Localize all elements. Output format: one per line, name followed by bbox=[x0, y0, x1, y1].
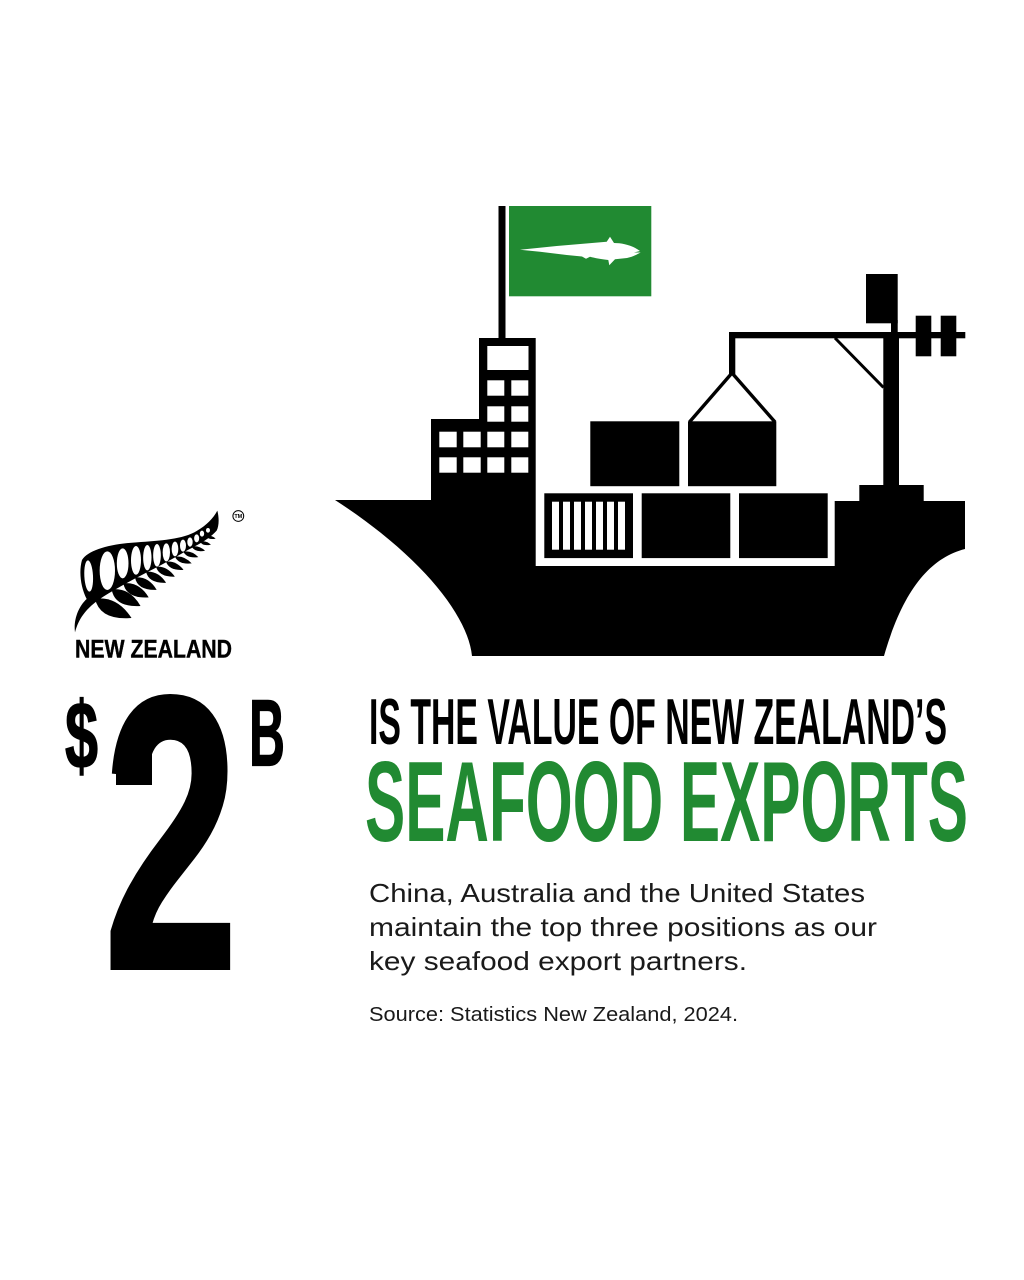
stat: $2B: 2 bbox=[103, 614, 239, 1052]
superstructure windows bbox=[439, 346, 528, 473]
icon: cargo ship bbox=[335, 206, 965, 656]
fern mark bbox=[75, 511, 219, 632]
body text: China, Australia and the United States bbox=[369, 878, 865, 908]
source note: Source: Statistics New Zealand, 2024. bbox=[369, 1004, 738, 1026]
crane bbox=[690, 274, 965, 486]
hull and superstructure bbox=[335, 338, 965, 656]
logo: New Zealand fern bbox=[75, 511, 244, 664]
stat: $2B: B bbox=[249, 680, 285, 786]
heading bbox=[365, 685, 968, 866]
trademark symbol: TM bbox=[234, 514, 243, 520]
stat: $2B: $ bbox=[65, 683, 98, 789]
body text: maintain the top three positions as our bbox=[369, 912, 877, 942]
trademark symbol bbox=[233, 511, 244, 521]
flag with fish bbox=[498, 206, 651, 340]
container slats bbox=[552, 502, 625, 550]
body text bbox=[369, 878, 877, 976]
logo wordmark: NEW ZEALAND bbox=[75, 636, 232, 664]
body text: key seafood export partners. bbox=[369, 946, 747, 976]
cargo containers bbox=[544, 421, 828, 558]
